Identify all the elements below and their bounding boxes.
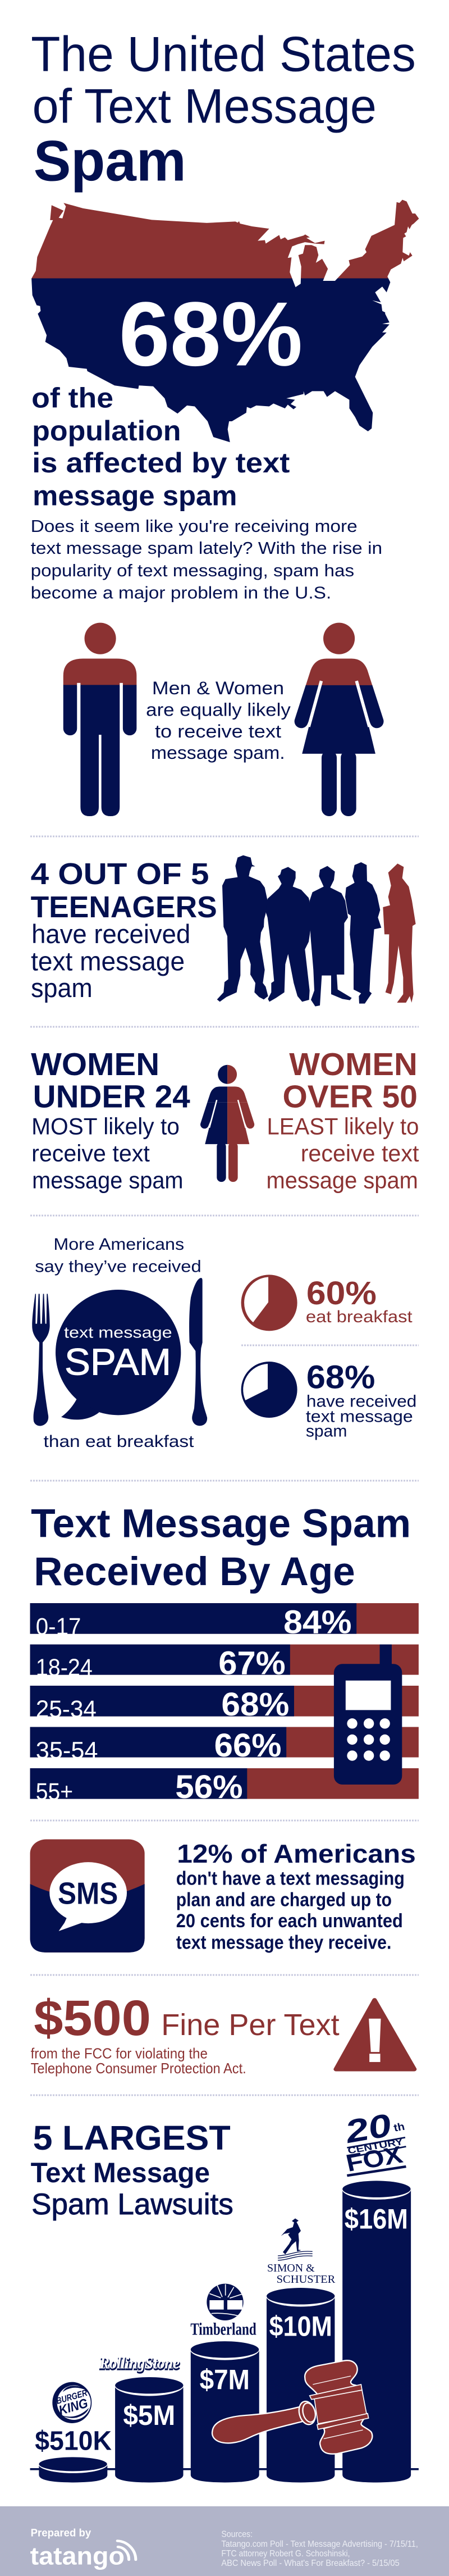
bar chart: 35-54 xyxy=(36,1737,98,1764)
pie chart: 60% eat breakfast: 60% xyxy=(306,1275,377,1312)
teenagers text: 4 OUT OF 5 xyxy=(31,857,209,891)
cylinder bar chart xyxy=(30,2178,419,2482)
prepared by tatango: Prepared by xyxy=(31,2527,91,2539)
prepared by tatango: tatango xyxy=(30,2542,125,2570)
footer xyxy=(0,2506,449,2576)
intro paragraph xyxy=(31,517,382,602)
logo: Simon and Schuster: SCHUSTER xyxy=(277,2273,336,2286)
bar chart: 84% xyxy=(283,1604,352,1641)
map of the United States xyxy=(31,200,419,442)
women under 24 text: WOMEN xyxy=(31,1046,159,1082)
title: of Text Message xyxy=(33,79,377,133)
logo: 20th Century Fox xyxy=(341,2107,406,2177)
teenagers text xyxy=(31,857,217,1003)
bar: Timberland $7M xyxy=(190,2339,259,2482)
more Americans text: More Americans xyxy=(53,1235,184,1254)
icon: half and half woman xyxy=(200,1065,254,1182)
logo: Simon and Schuster: SIMON & xyxy=(267,2262,315,2274)
bar chart: 56% xyxy=(175,1769,243,1805)
12% of Americans text: plan and are charged up to xyxy=(176,1889,392,1910)
12% of Americans text: text message they receive. xyxy=(176,1932,391,1953)
logo: 20th Century Fox: th xyxy=(393,2121,406,2134)
68% figure: 68% xyxy=(119,284,303,385)
women under 24 text: UNDER 24 xyxy=(33,1078,190,1114)
sources xyxy=(221,2528,418,2568)
intro paragraph: text message spam lately? With the rise in xyxy=(31,539,382,558)
speech bubble: SPAM xyxy=(65,1341,171,1383)
bar: 20th Century Fox $16M xyxy=(342,2178,411,2482)
women under 24 text: message spam xyxy=(32,1167,184,1193)
men and women text: are equally likely xyxy=(146,699,291,720)
teenagers text: TEENAGERS xyxy=(31,890,217,924)
pie chart: 60% eat breakfast: eat breakfast xyxy=(306,1308,413,1326)
men and women text xyxy=(146,677,291,763)
bar chart xyxy=(30,1603,419,1805)
$500 fine text xyxy=(31,1990,340,2077)
bar chart: 0-17 xyxy=(36,1613,81,1640)
bar: 20th Century Fox $16M: $16M xyxy=(345,2204,408,2235)
age chart heading: Text Message Spam xyxy=(31,1501,411,1546)
icon: woman xyxy=(295,623,384,816)
bar chart: 25-34 xyxy=(36,1696,97,1723)
age chart section xyxy=(30,1501,419,1805)
speech bubble: text message xyxy=(64,1324,172,1341)
logo: 20th Century Fox: CENTURY xyxy=(347,2136,404,2156)
men and women text: message spam. xyxy=(151,742,285,763)
teenagers text: spam xyxy=(31,973,93,1003)
$500 fine text: Telephone Consumer Protection Act. xyxy=(31,2060,246,2077)
more Americans text: say they’ve received xyxy=(35,1257,201,1276)
$500 fine text: from the FCC for violating the xyxy=(31,2045,208,2061)
intro and men and women section xyxy=(31,517,384,816)
lawsuits heading xyxy=(31,2119,233,2220)
pie chart: 68% received spam: have received xyxy=(306,1392,416,1411)
women over 50 text: WOMEN xyxy=(289,1046,418,1082)
logo: Timberland: Timberland xyxy=(190,2320,256,2339)
sources: ABC News Poll - What's For Breakfast? - 5/15/05 xyxy=(221,2557,400,2568)
speech bubble xyxy=(56,1290,181,1419)
plate graphic: fork, knife and speech bubble xyxy=(32,1278,207,1426)
bar: Timberland $7M: $7M xyxy=(200,2364,250,2396)
logo: 20th Century Fox: FOX xyxy=(343,2141,405,2177)
icon: knife xyxy=(189,1278,207,1426)
68% caption: message spam xyxy=(33,480,237,511)
women over 50 text: LEAST likely to xyxy=(267,1113,419,1139)
pie chart: 68% received spam: 68% xyxy=(306,1359,375,1395)
icon: man xyxy=(63,623,136,816)
teenagers text: have received xyxy=(31,920,190,949)
men and women text: to receive text xyxy=(155,721,281,741)
pie chart: 68% received spam xyxy=(241,1359,416,1441)
icon: gavel xyxy=(212,2360,372,2454)
$500 fine text: Fine Per Text xyxy=(161,2009,340,2042)
68% caption xyxy=(31,383,290,511)
pie chart: 60% eat breakfast xyxy=(241,1275,413,1331)
title: The United States xyxy=(31,26,416,82)
bar: Simon and Schuster $10M xyxy=(266,2286,335,2482)
women over 50 text: receive text xyxy=(301,1140,419,1166)
men and women text: Men & Women xyxy=(152,677,284,698)
logo: Burger King xyxy=(52,2382,91,2423)
intro paragraph: become a major problem in the U.S. xyxy=(31,584,331,602)
lawsuits chart section xyxy=(30,2178,419,2482)
sources: FTC attorney Robert G. Schoshinski, xyxy=(221,2548,350,2559)
icon: fork xyxy=(32,1294,50,1426)
prepared by tatango xyxy=(30,2527,136,2570)
bar chart: 66% xyxy=(214,1727,282,1764)
bar: Burger King $510K: $510K xyxy=(35,2425,112,2456)
lawsuits heading: Text Message xyxy=(31,2158,210,2188)
68% caption: population xyxy=(32,415,181,447)
lawsuits heading: Spam Lawsuits xyxy=(31,2187,233,2220)
logo: Burger King: KING xyxy=(57,2396,89,2418)
women over 50 text: OVER 50 xyxy=(283,1078,418,1114)
logo: Burger King: BURGER xyxy=(55,2388,89,2406)
women under 24 text xyxy=(31,1046,190,1193)
bar chart: 18-24 xyxy=(36,1654,93,1681)
sources: Sources: xyxy=(221,2528,253,2539)
bar chart: 55+ xyxy=(36,1778,73,1805)
women by age section xyxy=(31,1046,419,1193)
bar: Simon and Schuster $10M: $10M xyxy=(269,2311,332,2342)
logo: Rolling Stone: RollingStone xyxy=(99,2355,180,2373)
12% of Americans text xyxy=(176,1840,416,1953)
SMS, fine and lawsuit heading section xyxy=(30,1840,416,2220)
breakfast section xyxy=(32,1235,416,1451)
logo: 20th Century Fox: 20 xyxy=(341,2107,395,2150)
$500 fine text: $500 xyxy=(34,1990,151,2046)
12% of Americans text: 12% of Americans xyxy=(177,1840,416,1868)
teenagers text: text message xyxy=(31,947,185,976)
bar chart: 68% xyxy=(221,1686,289,1723)
bar chart: 67% xyxy=(218,1645,286,1682)
icon: mobile phone xyxy=(334,1645,402,1785)
68% caption: of the xyxy=(31,383,113,414)
intro paragraph: Does it seem like you're receiving more xyxy=(31,517,358,536)
women under 24 text: MOST likely to xyxy=(31,1113,180,1139)
title: Spam xyxy=(34,129,186,193)
than eat breakfast text: than eat breakfast xyxy=(44,1432,194,1451)
icon: SMS badge: SMS xyxy=(58,1877,118,1911)
teenager silhouettes xyxy=(217,855,416,1007)
age chart heading xyxy=(31,1501,411,1594)
logo: Rolling Stone: RollingStone xyxy=(99,2356,180,2374)
intro paragraph: popularity of text messaging, spam has xyxy=(31,562,354,580)
lawsuits heading: 5 LARGEST xyxy=(33,2119,231,2157)
pie chart: 68% received spam: spam xyxy=(306,1422,347,1441)
bar: Burger King $510K xyxy=(35,2425,112,2482)
pie chart: 68% received spam: text message xyxy=(306,1408,413,1426)
more Americans text xyxy=(35,1235,201,1276)
age chart heading: Received By Age xyxy=(34,1549,355,1594)
hero section xyxy=(31,26,419,511)
women under 24 text: receive text xyxy=(31,1140,150,1166)
icon: SMS badge xyxy=(30,1840,145,1953)
teenagers section xyxy=(31,855,416,1007)
title xyxy=(31,26,416,193)
women over 50 text xyxy=(266,1046,419,1193)
bar: Rolling Stone $5M xyxy=(114,2375,184,2482)
women over 50 text: message spam xyxy=(266,1167,418,1193)
logo: Simon and Schuster xyxy=(267,2218,336,2286)
icon: warning triangle xyxy=(336,2000,414,2069)
bar: Rolling Stone $5M: $5M xyxy=(123,2400,175,2431)
logo: Timberland xyxy=(190,2284,256,2339)
68% caption: is affected by text xyxy=(32,447,290,479)
